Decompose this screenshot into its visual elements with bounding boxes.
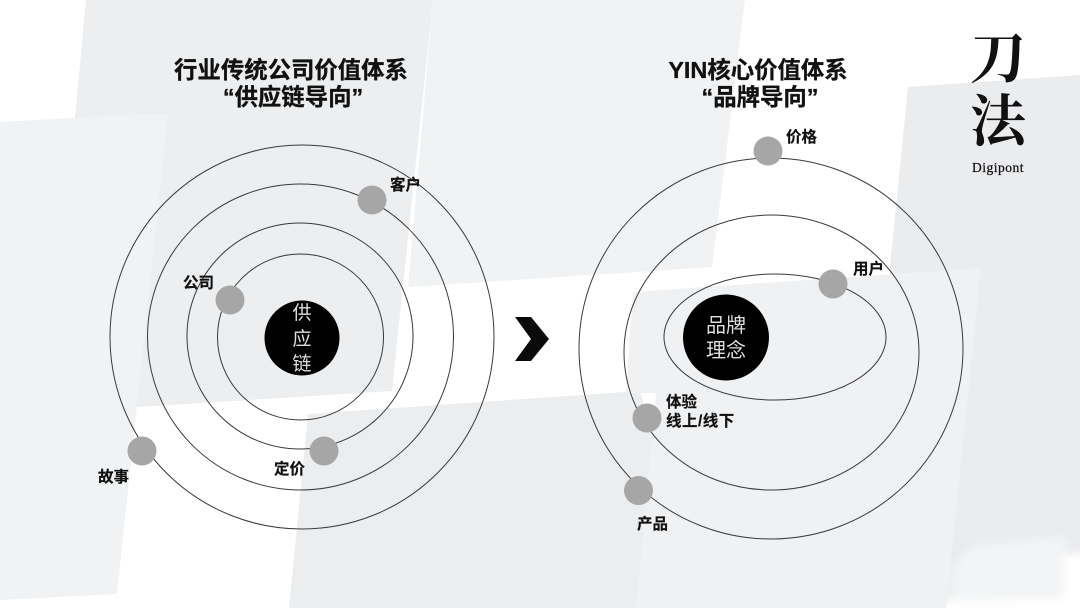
diagram: brand orientation orbits bbox=[579, 127, 963, 539]
node: price bbox=[754, 127, 818, 166]
node: pricing bbox=[274, 436, 338, 478]
diagram: supply chain orientation orbits bbox=[98, 145, 494, 529]
node: user bbox=[818, 259, 884, 298]
center: supply chain bbox=[264, 300, 340, 376]
node: pricing: 定价 bbox=[274, 459, 306, 478]
title: YIN core value system: YIN核心价值体系 bbox=[668, 57, 848, 83]
node: experience online/offline: 体验 bbox=[666, 392, 698, 411]
node: product: 产品 bbox=[637, 515, 668, 533]
center: supply chain: 链 bbox=[292, 353, 312, 375]
node: story bbox=[98, 436, 156, 486]
logo: Daofa Digipont: Digipont bbox=[972, 160, 1024, 175]
node: product bbox=[624, 476, 668, 533]
orbit rings, right bbox=[579, 158, 963, 539]
orbit rings, left bbox=[110, 145, 494, 529]
node: price: 价格 bbox=[786, 127, 818, 146]
center: brand philosophy bbox=[683, 294, 769, 380]
title: traditional company value system: 行业传统公司价值体系 bbox=[174, 57, 408, 83]
logo: Daofa Digipont: 刀 bbox=[970, 29, 1026, 91]
title: YIN core value system: “品牌导向” bbox=[702, 84, 818, 110]
node: company bbox=[183, 275, 244, 314]
node: user: 用户 bbox=[853, 259, 884, 278]
title: traditional company value system bbox=[174, 57, 408, 110]
node: story: 故事 bbox=[98, 467, 129, 486]
logo: Daofa Digipont: 法 bbox=[970, 92, 1030, 154]
node: customer bbox=[358, 175, 421, 214]
center: supply chain: 供 bbox=[292, 302, 312, 324]
center: brand philosophy: 理念 bbox=[706, 338, 746, 362]
node: experience online/offline: 线上/线下 bbox=[666, 411, 735, 430]
node: experience online/offline bbox=[632, 392, 735, 432]
node: customer: 客户 bbox=[390, 175, 421, 194]
center: brand philosophy: 品牌 bbox=[706, 314, 746, 337]
title: YIN core value system bbox=[668, 57, 848, 110]
node: company: 公司 bbox=[183, 275, 214, 292]
arrow: chevron bbox=[515, 317, 549, 361]
logo: Daofa Digipont bbox=[970, 29, 1030, 175]
center: supply chain: 应 bbox=[292, 328, 312, 350]
title: traditional company value system: “供应链导向” bbox=[223, 84, 363, 110]
